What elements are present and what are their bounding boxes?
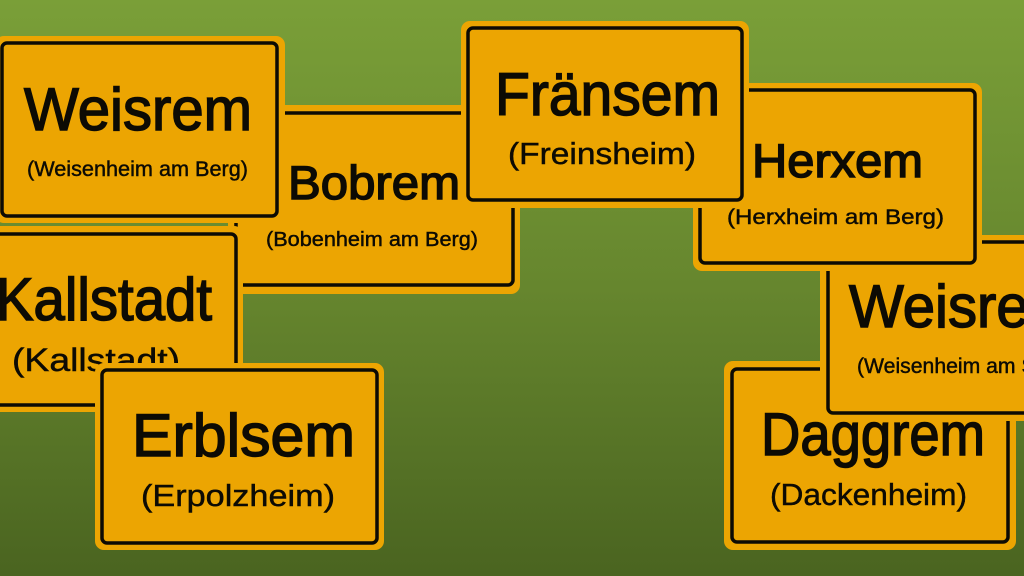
sign name: Fränsem: Fränsem [495, 61, 720, 128]
sign subtitle: Dackenheim: (Dackenheim) [770, 477, 967, 512]
sign: Weisre (cropped at right edge) [820, 235, 1024, 421]
sign: Fränsem [461, 21, 749, 208]
sign subtitle: Bobenheim am Berg: (Bobenheim am Berg) [266, 229, 478, 251]
sign subtitle: Kallstadt: (Kallstadt) [12, 342, 180, 378]
sign name: Kallstadt: Kallstadt [0, 266, 212, 333]
sign name: Weisrem: Weisrem [24, 76, 252, 143]
sign name: Daggrem: Daggrem [761, 401, 985, 468]
sign name: Herxem: Herxem [752, 134, 923, 187]
sign subtitle: Herxheim am Berg: (Herxheim am Berg) [727, 206, 944, 229]
sign name: Erblsem: Erblsem [132, 402, 355, 469]
sign: Weisrem [0, 36, 285, 223]
sign subtitle: Weisenheim am Berg: (Weisenheim am Berg) [27, 158, 248, 181]
sign subtitle: Erpolzheim: (Erpolzheim) [141, 478, 335, 513]
sign: Bobrem [228, 105, 520, 294]
sign name: Bobrem: Bobrem [288, 156, 460, 209]
sign: Herxem [693, 83, 982, 271]
sign: Erblsem [95, 363, 384, 550]
sign subtitle: Freinsheim: (Freinsheim) [508, 136, 696, 171]
sign: Daggrem [724, 361, 1016, 550]
sign: Kallstadt [0, 226, 243, 412]
